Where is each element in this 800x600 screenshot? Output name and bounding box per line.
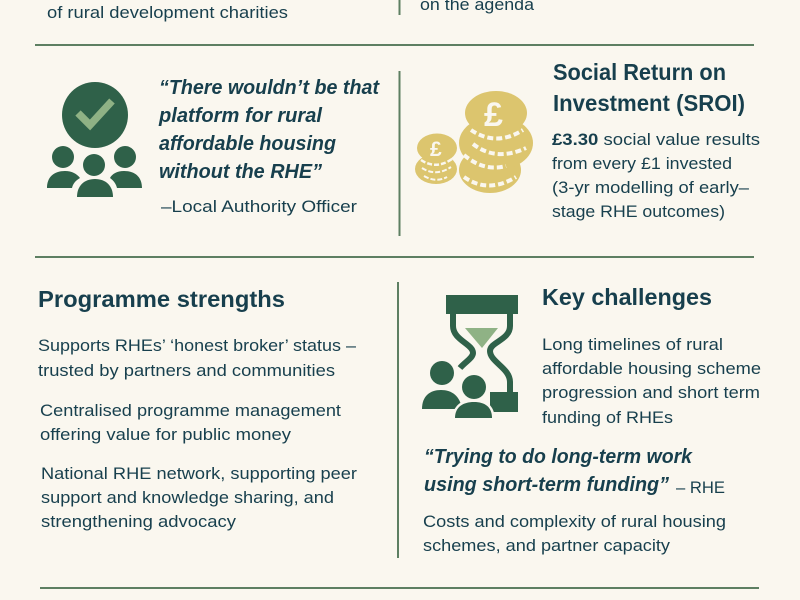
text: long timelines: funding of RHEs [542, 408, 673, 427]
panel: social return on investment: Investment (SROI) [553, 90, 745, 116]
text: centralised programme management [40, 401, 341, 444]
panel: social return on investment: (3-yr modelling of early– [552, 178, 750, 197]
text: costs and complexity: Costs and complexity of rural housing [423, 512, 726, 531]
text: national RHE network: National RHE network, supporting peer [41, 464, 357, 483]
quote: short-term funding: – RHE [676, 478, 725, 497]
icon: hourglass with people [422, 295, 518, 420]
quote: short-term funding [424, 446, 725, 497]
quote: local authority officer: platform for rural [158, 105, 322, 127]
panel: programme strengths [38, 286, 357, 531]
quote: local authority officer [158, 77, 380, 216]
quote: local authority officer: without the RHE” [159, 161, 322, 183]
icon: stacks of pound coins: £ [430, 138, 442, 161]
text: long timelines: Long timelines of rural [542, 335, 723, 354]
quote: local authority officer: –Local Authority Officer [161, 197, 357, 216]
quote: local authority officer: affordable housing [159, 133, 336, 155]
heading: key challenges: Key challenges [542, 284, 712, 310]
text: long timelines [542, 335, 761, 427]
icon: people with check mark [47, 82, 142, 197]
icon: stacks of pound coins [415, 91, 533, 193]
text: national RHE network: support and knowledge sharing, and [41, 488, 334, 507]
quote: short-term funding: using short-term funding” [424, 474, 669, 496]
quote: local authority officer: “There wouldn’t be that [159, 77, 380, 99]
text: long timelines: affordable housing scheme [542, 359, 761, 378]
text: centralised programme management: Centralised programme management [40, 401, 341, 420]
panel: social return on investment: £3.30 social value results [552, 130, 760, 149]
panel: social return on investment [552, 59, 760, 221]
panel: social return on investment: Social Return on [553, 59, 726, 85]
panel: social return on investment: from every £1 invested [552, 154, 732, 173]
text: rural development charities (cropped): of rural development charities [47, 3, 288, 22]
text: honest broker status: Supports RHEs’ ‘honest broker’ status – [38, 336, 357, 355]
panel: social return on investment: stage RHE outcomes) [552, 202, 725, 221]
text: costs and complexity: schemes, and partner capacity [423, 536, 671, 555]
text: centralised programme management: offering value for public money [40, 425, 292, 444]
text: honest broker status: trusted by partners and communities [38, 361, 335, 380]
heading: programme strengths: Programme strengths [38, 286, 285, 312]
icon: stacks of pound coins: £ [484, 96, 503, 134]
text: national RHE network [41, 464, 357, 531]
text: national RHE network: strengthening advocacy [41, 512, 237, 531]
quote: short-term funding: “Trying to do long-term work [424, 446, 693, 468]
text: long timelines: progression and short term [542, 383, 760, 402]
text: honest broker status [38, 336, 357, 380]
text: costs and complexity [423, 512, 726, 555]
panel: key challenges [423, 284, 761, 555]
